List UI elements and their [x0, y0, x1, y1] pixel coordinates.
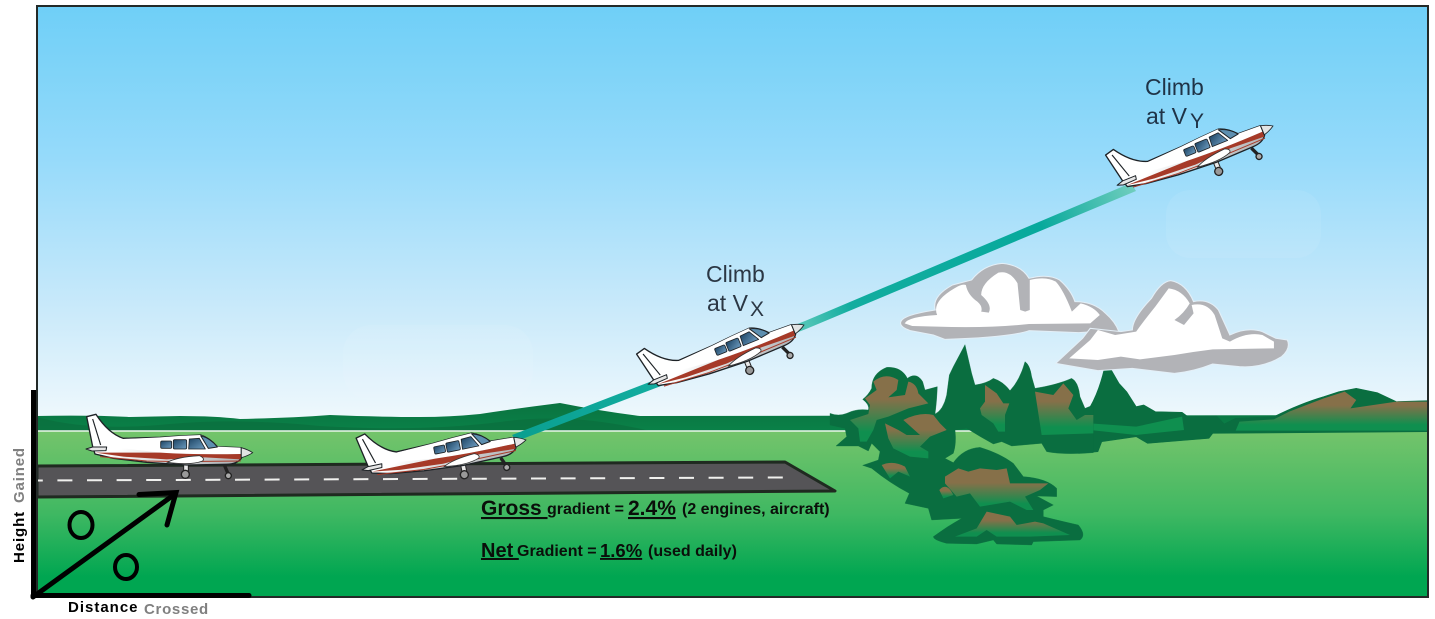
label: climb at Vx: X	[750, 298, 764, 321]
foliage patch: lower bush side	[939, 487, 953, 498]
gradient triangle axes and arrow	[33, 390, 249, 597]
net gradient text: Net	[481, 540, 519, 562]
ground	[37, 431, 1428, 597]
axis label: distance crossed	[68, 599, 209, 618]
gross gradient text	[481, 497, 830, 520]
faint sky patches	[343, 190, 1321, 400]
symbol: right O	[115, 555, 137, 579]
label: climb at Vx: Climb	[706, 261, 765, 287]
label: climb at Vx: at V	[707, 290, 749, 316]
net gradient text: 1.6%	[600, 540, 642, 561]
label: climb at Vy: at V	[1146, 103, 1188, 129]
gross gradient text: gradient =	[547, 501, 624, 518]
far trees and hill	[1075, 353, 1427, 453]
foliage patch: bottom bush	[955, 512, 1070, 537]
net gradient text: (used daily)	[648, 543, 737, 560]
net gradient text	[481, 540, 737, 562]
gross gradient text: (2 engines, aircraft)	[682, 501, 830, 518]
axis label: height gained	[11, 447, 28, 563]
aircraft on runway	[86, 414, 253, 479]
foliage patch: small bush	[882, 463, 910, 478]
label: climb at Vx	[706, 261, 765, 321]
net gradient text: Gradient =	[517, 543, 597, 560]
background: sky	[37, 7, 1428, 432]
axis label: distance crossed: Crossed	[144, 601, 209, 618]
aircraft at rotation	[355, 402, 531, 499]
axis label: distance crossed: Distance	[68, 599, 139, 616]
foliage patch: upper bush	[850, 376, 928, 442]
horizon band	[37, 403, 1428, 431]
label: climb at Vy: Y	[1190, 110, 1204, 133]
cloud: right	[1056, 281, 1288, 373]
foliage patch: right of firs	[1035, 383, 1093, 435]
foliage patch: between firs	[980, 385, 1009, 432]
gross gradient text: Gross	[481, 497, 548, 520]
axis label: height gained: Gained	[11, 447, 28, 503]
cloud: left	[901, 263, 1119, 339]
runway	[37, 462, 835, 497]
foliage patch: lower bush	[945, 468, 1048, 510]
symbol: left O	[70, 512, 92, 538]
trees and bushes	[830, 345, 1093, 545]
label: climb at Vy: Climb	[1145, 74, 1204, 100]
foliage patch: middle bush	[885, 414, 947, 458]
label: climb at Vy	[1145, 74, 1204, 133]
climb path	[512, 183, 1136, 441]
aircraft climbing at Vx	[635, 289, 814, 412]
aircraft climbing at Vy	[1104, 90, 1283, 213]
gross gradient text: 2.4%	[628, 497, 676, 520]
axis label: height gained: Height	[11, 511, 28, 563]
